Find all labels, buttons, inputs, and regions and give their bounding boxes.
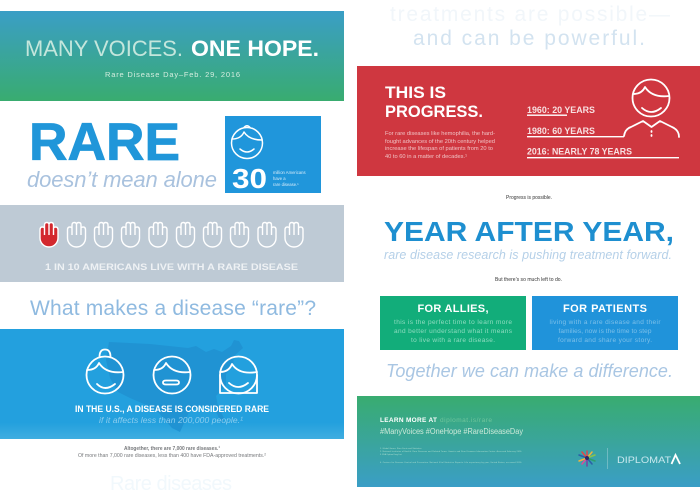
- footnotes: 3. FDA Orphan Drug List.: [380, 453, 402, 456]
- panel: for allies: [380, 296, 526, 350]
- heading: rare: RARE: [29, 113, 180, 172]
- note: progress is possible: Progress is possible.: [506, 195, 552, 201]
- hashtags: #ManyVoices #OneHope #RareDiseaseDay: [380, 427, 523, 436]
- footnotes: 4. Centers for Disease Control and Prevention. National Vital Statistics Reports. Life expectancy by year, United States, accessed 2016.: [380, 461, 522, 464]
- panel: for patients: [532, 296, 678, 350]
- heading: and can be powerful: and can be powerful.: [413, 27, 645, 50]
- stat caption: rare disease.¹: [273, 182, 299, 187]
- heading: FOR ALLIES,: [418, 303, 488, 315]
- call to action: diplomat.is/rare: [440, 417, 492, 424]
- icon: face with bun: [86, 350, 124, 394]
- stat caption: [273, 170, 306, 187]
- panel: 30 million stat: [225, 116, 321, 194]
- paragraph: For rare diseases like hemophilia, the hard-: [385, 131, 495, 137]
- heading: THIS IS: [385, 84, 446, 102]
- body text: families, now is the time to step: [558, 328, 652, 335]
- subtitle: date: Rare Disease Day–Feb. 29, 2016: [105, 70, 240, 79]
- text block: disease counts: Altogether, there are 7,000 rare diseases.¹: [124, 446, 220, 452]
- subheading: research: rare disease research is pushing treatment forward.: [384, 248, 672, 262]
- timeline: lifespan years: 2016: NEARLY 78 YEARS: [527, 146, 632, 156]
- heading: what makes a disease rare: What makes a disease “rare”?: [30, 297, 316, 320]
- panel: this is progress: [357, 66, 700, 176]
- footnotes: 2. National Institutes of Health. Rare Diseases and Related Terms. Genetic and Rare Diseases Information Center. Accessed February 2016.: [380, 450, 522, 453]
- paragraph: [385, 131, 495, 160]
- body text: [550, 319, 661, 344]
- panel: 1 in 10 Americans: [0, 205, 344, 282]
- text block: disease counts: Of more than 7,000 rare diseases, less than 400 have FDA-approved treatments.²: [78, 453, 266, 459]
- footnotes: [380, 447, 522, 464]
- note: so much left to do: But there’s so much left to do.: [495, 277, 562, 283]
- definition detail: if it affects less than 200,000 people.¹: [99, 415, 243, 425]
- body text: forward and share your story.: [558, 337, 652, 344]
- stat number: 30: [232, 163, 267, 194]
- stat caption: 1 IN 10 AMERICANS LIVE WITH A RARE DISEASE: [45, 262, 298, 273]
- panel: definition of rare: [0, 329, 344, 439]
- panel: footer: [357, 396, 700, 487]
- call to action: LEARN MORE AT: [380, 417, 437, 424]
- definition heading: IN THE U.S., A DISEASE IS CONSIDERED RARE: [75, 404, 269, 415]
- icon: face with bun: [232, 126, 262, 158]
- body text: living with a rare disease and their: [550, 319, 661, 326]
- title: [25, 36, 319, 61]
- body text: to live with a rare disease.: [411, 337, 495, 344]
- stat caption: million Americans: [273, 170, 306, 175]
- paragraph: fought advances of the 20th century helped: [385, 139, 495, 145]
- text block: disease counts: [78, 446, 266, 459]
- logo divider: [606, 448, 609, 469]
- timeline: lifespan years: 1960: 20 YEARS: [527, 105, 595, 115]
- map: United States silhouette: [106, 340, 243, 432]
- icon: person: [624, 80, 679, 137]
- title: MANY VOICES.: [25, 36, 183, 61]
- body text: [394, 319, 513, 344]
- icon row: hands: [40, 222, 303, 247]
- timeline: lifespan years: [527, 105, 679, 158]
- footnotes: 1. Global Genes. Rare Facts and Statistics.: [380, 447, 422, 450]
- title: ONE HOPE.: [191, 36, 319, 61]
- heading: year after year: YEAR AFTER YEAR,: [384, 216, 674, 247]
- paragraph: 40 to 60 in a matter of decades.¹: [385, 154, 467, 160]
- logo: diplomat: DIPLOMAT: [617, 455, 672, 465]
- icon: face with long hair: [220, 356, 257, 394]
- heading: [385, 84, 483, 121]
- call to action: [380, 417, 492, 424]
- panel: header banner: [0, 11, 344, 101]
- body text: this is the perfect time to learn more: [394, 319, 512, 326]
- paragraph: increase the lifespan of patients from 20 to: [385, 146, 493, 152]
- icon: face with moustache: [154, 356, 190, 394]
- timeline: lifespan years: 1980: 60 YEARS: [527, 126, 595, 136]
- body text: and better understand what it means: [394, 328, 513, 335]
- heading: FOR PATIENTS: [563, 303, 647, 315]
- tagline: together: Together we can make a difference.: [386, 361, 673, 381]
- logo: rare disease day: [579, 451, 595, 466]
- subheading: doesn't mean alone: doesn’t mean alone: [27, 167, 217, 192]
- stat caption: have a: [273, 176, 286, 181]
- heading: PROGRESS.: [385, 103, 483, 121]
- faded heading: rare diseases: Rare diseases: [110, 473, 232, 495]
- faded heading: treatments are possible: treatments are possible—: [390, 3, 670, 26]
